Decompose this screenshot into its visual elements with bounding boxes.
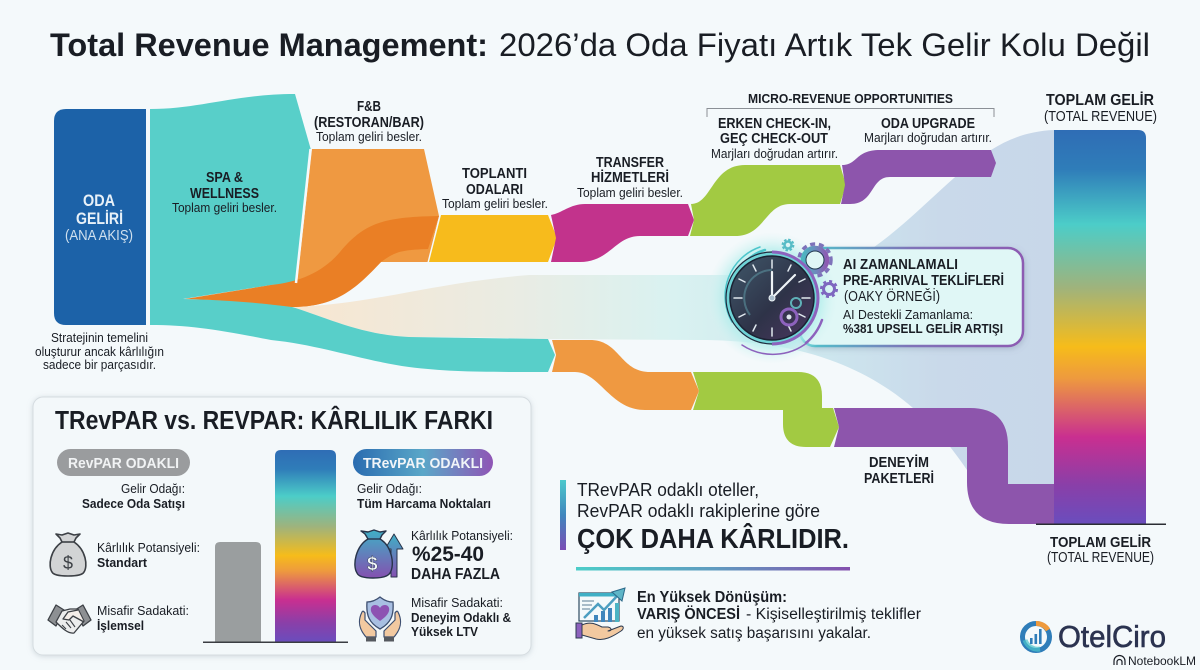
icon: colour money bag with arrow: [355, 530, 403, 578]
heading: micro-revenue opportunities: [707, 91, 994, 117]
text: revpar karlilik: [97, 541, 200, 570]
label: oda geliri: (ANA AKIŞ): [65, 227, 133, 244]
pill: revpar odakli: [57, 449, 190, 476]
label: f and b: F&B: [357, 99, 381, 115]
text block: highest conversion: En Yüksek Dönüşüm:: [637, 589, 787, 606]
panel: trevpar vs revpar: [33, 397, 531, 655]
flow: oda geliri block: [54, 109, 146, 325]
label: transfer hizmetleri: Toplam geliri besler.: [577, 186, 683, 200]
label: spa and wellness: Toplam geliri besler.: [172, 201, 277, 215]
flow: f and b dark overlay: [185, 216, 439, 307]
callout: ai pre-arrival offers: [706, 232, 1023, 364]
label: toplam gelir top: (TOTAL REVENUE): [1044, 108, 1157, 125]
icon: gray money bag: [50, 533, 86, 576]
text: revpar gelir odagi: Gelir Odağı:: [121, 482, 185, 496]
label: transfer hizmetleri: [577, 155, 683, 200]
panel card: [33, 397, 531, 655]
flow: lower orange: [552, 340, 699, 410]
text: trevpar karlilik: DAHA FAZLA: [411, 566, 500, 583]
label: oda geliri: [65, 192, 133, 244]
text: revpar karlilik: Kârlılık Potansiyeli:: [97, 541, 200, 555]
footer: notebooklm mark: NotebookLM: [1128, 654, 1196, 668]
callout text: AI ZAMANLAMALI: [843, 257, 958, 273]
label: erken check-in: Marjları doğrudan artırır.: [711, 147, 838, 161]
label: erken check-in: ERKEN CHECK-IN,: [718, 116, 831, 132]
logo: otelciro: OtelCiro: [1058, 619, 1166, 654]
label: deneyim paketleri: [864, 454, 934, 487]
icon: handshake: [48, 605, 91, 633]
label: deneyim paketleri: DENEYİM: [869, 454, 929, 471]
title: 2026’da Oda Fiyatı Artık Tek Gelir Kolu Değil: [499, 27, 1150, 63]
flow: oda upgrade: [841, 150, 996, 204]
label: toplam gelir top: TOPLAM GELİR: [1046, 91, 1154, 109]
text block: highest conversion: - Kişiselleştirilmiş teklifler: [746, 606, 921, 623]
text: revpar sadakat: İşlemsel: [97, 618, 144, 633]
icon: colour money bag with arrow: $: [367, 554, 378, 575]
text: revpar gelir odagi: Sadece Oda Satışı: [82, 497, 185, 511]
heading: micro-revenue opportunities: MICRO-REVENUE OPPORTUNITIES: [748, 91, 953, 106]
pill: trevpar odakli: [353, 449, 493, 476]
text: revpar sadakat: Misafir Sadakati:: [97, 604, 189, 618]
text: trevpar sadakat: Misafir Sadakati:: [411, 596, 503, 610]
text: strateji note: Stratejinin temelini: [51, 331, 148, 345]
label: oda geliri: GELİRİ: [76, 210, 123, 228]
icon: gray money bag: $: [63, 553, 73, 573]
pill: revpar odakli: RevPAR ODAKLI: [68, 455, 179, 472]
text: revpar karlilik: Standart: [97, 556, 148, 570]
label: toplanti odalari: [442, 166, 548, 211]
label: oda geliri: ODA: [83, 192, 115, 210]
text block: profit claim: ÇOK DAHA KÂRLIDIR.: [577, 523, 849, 554]
callout text: [843, 257, 1004, 336]
text block: profit claim: RevPAR odaklı rakiplerine göre: [577, 500, 820, 521]
label: toplanti odalari: TOPLANTI: [462, 166, 527, 182]
label: toplam gelir top: [1044, 91, 1157, 125]
flow: deneyim paketleri: [834, 408, 1054, 524]
label: f and b: [314, 99, 424, 144]
icon: small gears: [783, 240, 837, 297]
flow: f and b: [202, 149, 439, 307]
callout card: [800, 248, 1023, 346]
total revenue bar: [1036, 130, 1166, 525]
label: spa and wellness: WELLNESS: [190, 186, 259, 202]
icon: chart on hand: [576, 588, 625, 640]
label: toplam gelir bottom: TOPLAM GELİR: [1050, 534, 1151, 551]
label: toplam gelir bottom: (TOTAL REVENUE): [1047, 550, 1154, 566]
flow: spa and wellness: [150, 94, 555, 372]
title: Total Revenue Management:: [50, 27, 488, 63]
flow: erken check-in: [690, 165, 846, 236]
label: oda upgrade: Marjları doğrudan artırır.: [864, 131, 992, 145]
label: erken check-in: [711, 116, 838, 161]
label: toplanti odalari: ODALARI: [466, 182, 523, 198]
flow: toplanti odalari: [429, 215, 557, 262]
label: oda upgrade: [864, 116, 992, 145]
text block: profit claim: TRevPAR odaklı oteller,: [577, 479, 759, 500]
label: f and b: Toplam geliri besler.: [316, 130, 422, 144]
text block: highest conversion: en yüksek satış başarısını yakalar.: [637, 625, 871, 642]
flow: transfer hizmetleri: [551, 204, 694, 262]
label: deneyim paketleri: PAKETLERİ: [864, 470, 934, 487]
icon: clock with gears: [706, 232, 838, 364]
text: revpar sadakat: [97, 604, 189, 633]
text block: highest conversion: VARIŞ ÖNCESİ: [637, 606, 740, 623]
text: trevpar sadakat: Deneyim Odaklı &: [411, 611, 511, 625]
icon: large gear: [799, 244, 831, 276]
label: spa and wellness: [172, 170, 277, 215]
text block: profit claim: [560, 479, 850, 570]
flow: lower green: [693, 372, 839, 447]
clock hands: [772, 272, 795, 298]
label: oda upgrade: ODA UPGRADE: [881, 116, 975, 132]
text block: highest conversion: [637, 589, 921, 642]
text: trevpar karlilik: %25-40: [412, 543, 484, 566]
text: trevpar gelir odagi: Tüm Harcama Noktaları: [357, 497, 491, 511]
clock ticks: [734, 260, 810, 336]
text: trevpar sadakat: Yüksek LTV: [411, 625, 479, 639]
panel heading: TRevPAR vs. REVPAR: KÂRLILIK FARKI: [55, 405, 493, 435]
text: trevpar karlilik: [411, 529, 513, 583]
flow: pale total revenue stream: [292, 130, 1054, 486]
text: trevpar sadakat: [411, 596, 511, 639]
flow: gap lines: [296, 149, 440, 283]
label: f and b: (RESTORAN/BAR): [314, 115, 424, 131]
label: transfer hizmetleri: HİZMETLERİ: [591, 169, 669, 186]
text: strateji note: [35, 331, 164, 372]
title: [50, 27, 1150, 63]
callout text: AI Destekli Zamanlama:: [843, 308, 973, 322]
label: transfer hizmetleri: TRANSFER: [596, 155, 664, 171]
clock outer arcs: [725, 247, 822, 354]
text: strateji note: oluşturur ancak kârlılığın: [35, 345, 164, 359]
label: spa and wellness: SPA &: [206, 170, 243, 186]
text: revpar gelir odagi: [82, 482, 185, 511]
text: trevpar gelir odagi: [357, 482, 491, 511]
label: erken check-in: GEÇ CHECK-OUT: [720, 131, 828, 147]
text: trevpar karlilik: Kârlılık Potansiyeli:: [411, 529, 513, 543]
callout text: PRE-ARRIVAL TEKLİFLERİ: [843, 272, 1004, 289]
icon: heart shield and hands: [359, 597, 401, 642]
pill: trevpar odakli: TRevPAR ODAKLI: [363, 455, 483, 472]
bar chart: [203, 450, 348, 643]
label: toplam gelir bottom: [1047, 534, 1154, 566]
label: toplanti odalari: Toplam geliri besler.: [442, 197, 548, 211]
text: strateji note: sadece bir parçasıdır.: [43, 358, 156, 372]
sankey flow diagram: [54, 94, 1054, 524]
callout text: %381 UPSELL GELİR ARTIŞI: [843, 321, 1003, 336]
text: trevpar gelir odagi: Gelir Odağı:: [357, 482, 422, 496]
callout text: (OAKY ÖRNEĞİ): [844, 287, 940, 305]
